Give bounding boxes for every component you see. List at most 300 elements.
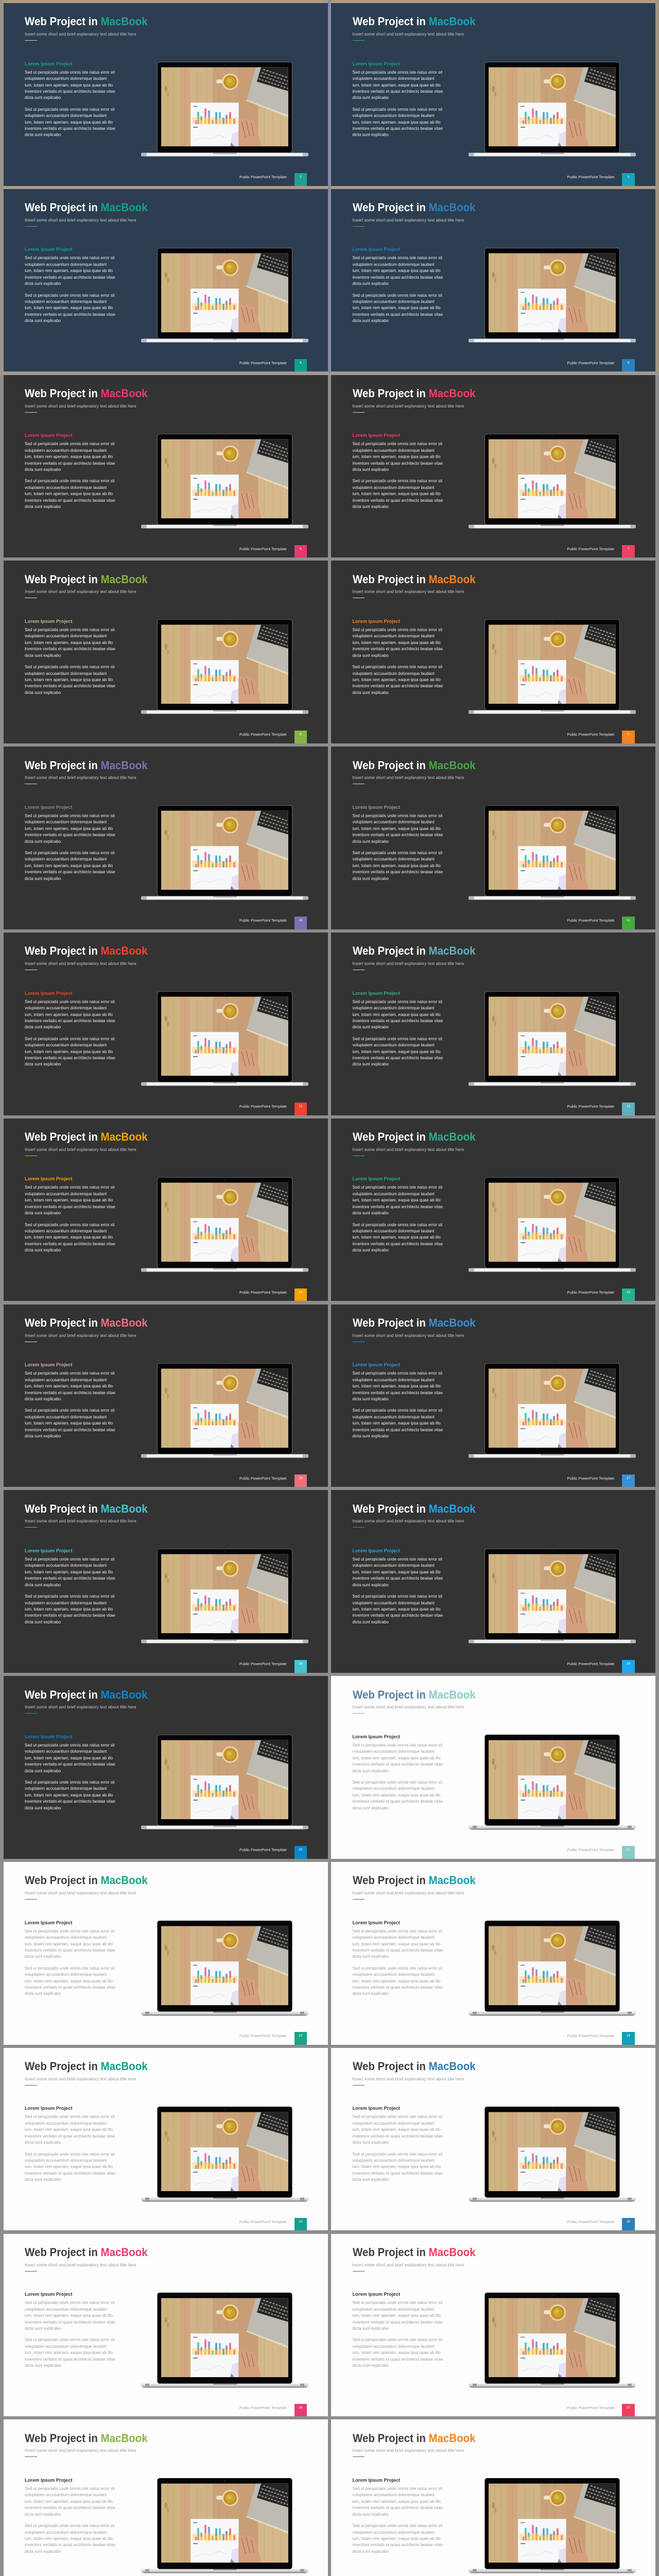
- subtitle: Insert some short and brief explanatory text about title here: [352, 2076, 464, 2081]
- slide 12: dark sea blue: [331, 933, 655, 1115]
- title: Web Project in MacBook: [352, 2432, 475, 2445]
- page badge: [294, 917, 307, 929]
- body text: inventore veritatis et quasi architecto beatae vitae: [25, 2171, 115, 2176]
- body text: inventore veritatis et quasi architecto beatae vitae: [352, 498, 443, 503]
- body text: inventore veritatis et quasi architecto beatae vitae: [25, 684, 115, 688]
- footer label: Public PowerPoint Template: [567, 918, 614, 923]
- section heading: Lorem Ipsum Project: [352, 61, 400, 66]
- body text: Sed ut perspiciatis unde omnis iste natus error sit: [25, 107, 115, 112]
- section heading: Lorem Ipsum Project: [25, 1176, 72, 1181]
- body text: ium, totam rem aperiam, eaque ipsa quae ab illo: [352, 2499, 441, 2504]
- body text: voluptatem accusantium doloremque laudant: [352, 448, 435, 453]
- body text: voluptatem accusantium doloremque laudant: [25, 76, 107, 81]
- body text: inventore veritatis et quasi architecto beatae vitae: [352, 2134, 443, 2139]
- body text: Sed ut perspiciatis unde omnis iste natus error sit: [352, 999, 442, 1004]
- body text: [352, 999, 443, 1066]
- section heading: Lorem Ipsum Project: [352, 247, 400, 252]
- body text: ium, totam rem aperiam, eaque ipsa quae ab illo: [25, 677, 113, 682]
- body text: [352, 1184, 443, 1254]
- page badge: [294, 545, 307, 557]
- laptop mockup: [469, 248, 636, 342]
- subtitle: Insert some short and brief explanatory text about title here: [352, 775, 464, 780]
- body text: dicta sunt explicabo: [352, 132, 389, 137]
- body text: [25, 1370, 115, 1439]
- subtitle: Insert some short and brief explanatory text about title here: [25, 1147, 136, 1152]
- body text: inventore veritatis et quasi architecto beatae vitae: [25, 647, 115, 651]
- page badge: [622, 359, 634, 371]
- body text: Sed ut perspiciatis unde omnis iste natus error sit: [25, 70, 115, 75]
- body text: voluptatem accusantium doloremque laudant: [25, 2158, 107, 2163]
- body text: ium, totam rem aperiam, eaque ipsa quae ab illo: [25, 2536, 113, 2541]
- body text: dicta sunt explicabo: [25, 467, 61, 472]
- body text: dicta sunt explicabo: [25, 2512, 61, 2517]
- body text: dicta sunt explicabo: [25, 132, 61, 137]
- body text: Sed ut perspiciatis unde omnis iste natus error sit: [352, 1780, 442, 1785]
- body text: inventore veritatis et quasi architecto beatae vitae: [352, 1428, 443, 1432]
- body text: inventore veritatis et quasi architecto beatae vitae: [352, 833, 443, 837]
- body text: ium, totam rem aperiam, eaque ipsa quae ab illo: [352, 2127, 441, 2132]
- laptop mockup: [141, 1177, 308, 1272]
- body text: inventore veritatis et quasi architecto beatae vitae: [352, 1762, 443, 1767]
- body text: [25, 1928, 115, 1997]
- title: Web Project in MacBook: [352, 201, 475, 214]
- body text: ium, totam rem aperiam, eaque ipsa quae ab illo: [25, 492, 113, 496]
- slide 8: dark orange: [331, 561, 655, 743]
- body text: dicta sunt explicabo: [25, 1211, 61, 1215]
- slide 17: dark aqua: [3, 1490, 327, 1673]
- page badge: [294, 2218, 307, 2230]
- page badge: [622, 1289, 634, 1301]
- body text: Sed ut perspiciatis unde omnis iste natus error sit: [352, 479, 442, 483]
- body text: inventore veritatis et quasi architecto beatae vitae: [352, 2543, 443, 2547]
- subtitle: Insert some short and brief explanatory text about title here: [25, 2076, 136, 2081]
- page badge: 8: [300, 733, 302, 736]
- page badge: [294, 359, 307, 371]
- body text: ium, totam rem aperiam, eaque ipsa quae ab illo: [25, 120, 113, 125]
- title: Web Project in MacBook: [25, 944, 148, 957]
- body text: dicta sunt explicabo: [352, 1583, 389, 1587]
- slide 15: dark salmon: [3, 1304, 327, 1487]
- body text: dicta sunt explicabo: [352, 2140, 389, 2145]
- slide 1: navy teal: [3, 3, 327, 185]
- body text: dicta sunt explicabo: [352, 1954, 389, 1959]
- subtitle: Insert some short and brief explanatory text about title here: [352, 217, 464, 223]
- section heading: Lorem Ipsum Project: [352, 1176, 400, 1181]
- body text: voluptatem accusantium doloremque laudant: [352, 1935, 435, 1940]
- body text: inventore veritatis et quasi architecto beatae vitae: [352, 870, 443, 874]
- body text: inventore veritatis et quasi architecto beatae vitae: [25, 1799, 115, 1804]
- section heading: Lorem Ipsum Project: [25, 1734, 72, 1739]
- section heading: Lorem Ipsum Project: [352, 2292, 400, 2297]
- body text: voluptatem accusantium doloremque laudant: [352, 1006, 435, 1010]
- body text: voluptatem accusantium doloremque laudant: [25, 1601, 107, 1605]
- body text: dicta sunt explicabo: [352, 1806, 389, 1810]
- body text: [25, 442, 115, 509]
- body text: inventore veritatis et quasi architecto beatae vitae: [25, 1948, 115, 1953]
- body text: Sed ut perspiciatis unde omnis iste natus error sit: [25, 442, 115, 446]
- page badge: 18: [299, 1662, 302, 1666]
- laptop mockup: [141, 62, 308, 157]
- body text: dicta sunt explicabo: [352, 2512, 389, 2517]
- title: Web Project in MacBook: [25, 15, 148, 28]
- body text: dicta sunt explicabo: [25, 1397, 61, 1401]
- body text: voluptatem accusantium doloremque laudant: [352, 299, 435, 304]
- page badge: [622, 1103, 634, 1115]
- laptop mockup: [141, 805, 308, 900]
- subtitle: Insert some short and brief explanatory text about title here: [352, 961, 464, 966]
- subtitle: Insert some short and brief explanatory text about title here: [25, 2262, 136, 2267]
- body text: dicta sunt explicabo: [352, 839, 389, 844]
- page badge: [294, 173, 307, 185]
- body text: dicta sunt explicabo: [352, 467, 389, 472]
- footer label: Public PowerPoint Template: [239, 1848, 287, 1852]
- footer label: Public PowerPoint Template: [239, 2033, 287, 2038]
- body text: Sed ut perspiciatis unde omnis iste natus error sit: [25, 851, 115, 855]
- section heading: Lorem Ipsum Project: [25, 1920, 72, 1925]
- title: Web Project in MacBook: [25, 387, 148, 400]
- title: Web Project in MacBook: [352, 1688, 475, 1701]
- body text: dicta sunt explicabo: [352, 1211, 389, 1215]
- body text: ium, totam rem aperiam, eaque ipsa quae ab illo: [352, 454, 441, 459]
- body text: [352, 442, 443, 509]
- body text: inventore veritatis et quasi architecto beatae vitae: [352, 2319, 443, 2325]
- body text: [25, 1185, 115, 1252]
- title: Web Project in MacBook: [25, 573, 148, 586]
- subtitle: Insert some short and brief explanatory text about title here: [25, 961, 136, 966]
- page badge: 22: [299, 2034, 302, 2038]
- subtitle: Insert some short and brief explanatory text about title here: [352, 2448, 464, 2453]
- section heading: Lorem Ipsum Project: [352, 619, 400, 624]
- body text: voluptatem accusantium doloremque laudant: [25, 2121, 107, 2126]
- laptop mockup: [141, 2478, 308, 2574]
- section heading: Lorem Ipsum Project: [352, 1362, 400, 1367]
- footer label: Public PowerPoint Template: [567, 1104, 614, 1109]
- body text: ium, totam rem aperiam, eaque ipsa quae ab illo: [352, 863, 441, 868]
- laptop mockup: [469, 805, 636, 900]
- body text: voluptatem accusantium doloremque laudant: [352, 820, 435, 824]
- body text: dicta sunt explicabo: [352, 2549, 389, 2554]
- body text: dicta sunt explicabo: [25, 839, 61, 844]
- body text: ium, totam rem aperiam, eaque ipsa quae ab illo: [352, 2164, 441, 2169]
- section heading: Lorem Ipsum Project: [352, 805, 400, 810]
- body text: dicta sunt explicabo: [352, 1991, 389, 1996]
- section heading: Lorem Ipsum Project: [25, 2478, 72, 2483]
- body text: ium, totam rem aperiam, eaque ipsa quae ab illo: [352, 1235, 441, 1240]
- body text: inventore veritatis et quasi architecto beatae vitae: [352, 1390, 443, 1395]
- body text: voluptatem accusantium doloremque laudant: [25, 857, 107, 861]
- footer label: Public PowerPoint Template: [239, 175, 287, 179]
- body text: [352, 2114, 443, 2183]
- body text: voluptatem accusantium doloremque laudant: [25, 1935, 107, 1940]
- body text: Sed ut perspiciatis unde omnis iste natus error sit: [25, 665, 115, 669]
- slide 25: light pink: [3, 2234, 327, 2416]
- body text: ium, totam rem aperiam, eaque ipsa quae ab illo: [25, 1198, 113, 1202]
- body text: [352, 2300, 443, 2369]
- title: Web Project in MacBook: [352, 2246, 475, 2259]
- page badge: 3: [627, 175, 629, 179]
- page badge: [294, 2404, 307, 2416]
- body text: inventore veritatis et quasi architecto beatae vitae: [25, 2505, 115, 2510]
- section heading: Lorem Ipsum Project: [352, 2106, 400, 2111]
- slide 14: dark emerald: [331, 1118, 655, 1301]
- body text: Sed ut perspiciatis unde omnis iste natus error sit: [25, 2337, 115, 2342]
- body text: ium, totam rem aperiam, eaque ipsa quae ab illo: [352, 2350, 441, 2355]
- body text: inventore veritatis et quasi architecto beatae vitae: [25, 1762, 115, 1767]
- laptop mockup: [141, 1549, 308, 1645]
- section heading: Lorem Ipsum Project: [25, 61, 72, 66]
- body text: [352, 1742, 443, 1811]
- body text: [25, 2114, 115, 2183]
- footer label: Public PowerPoint Template: [239, 2405, 287, 2410]
- body text: dicta sunt explicabo: [25, 1434, 61, 1438]
- body text: dicta sunt explicabo: [25, 1806, 61, 1810]
- title: Web Project in MacBook: [25, 1874, 148, 1887]
- slide 22: light cyan: [331, 1862, 655, 2044]
- footer label: Public PowerPoint Template: [567, 2219, 614, 2224]
- body text: voluptatem accusantium doloremque laudant: [25, 2344, 107, 2349]
- page badge: 4: [300, 361, 302, 365]
- slide 21: light teal: [3, 1862, 327, 2044]
- footer label: Public PowerPoint Template: [567, 2405, 614, 2410]
- slide 7: dark olive green: [3, 561, 327, 743]
- footer label: Public PowerPoint Template: [567, 1476, 614, 1481]
- slide 2: navy cyan: [331, 3, 655, 185]
- body text: voluptatem accusantium doloremque laudant: [352, 1229, 435, 1233]
- body text: Sed ut perspiciatis unde omnis iste natus error sit: [25, 1594, 115, 1599]
- body text: Sed ut perspiciatis unde omnis iste natus error sit: [25, 814, 115, 818]
- body text: voluptatem accusantium doloremque laudant: [352, 2344, 435, 2349]
- subtitle: Insert some short and brief explanatory text about title here: [25, 31, 136, 37]
- body text: voluptatem accusantium doloremque laudant: [25, 1972, 107, 1977]
- body text: ium, totam rem aperiam, eaque ipsa quae ab illo: [352, 1384, 441, 1388]
- title: Web Project in MacBook: [352, 15, 475, 28]
- laptop mockup: [469, 62, 636, 157]
- subtitle: Insert some short and brief explanatory text about title here: [352, 589, 464, 594]
- body text: Sed ut perspiciatis unde omnis iste natus error sit: [25, 2152, 115, 2157]
- page badge: [622, 545, 634, 557]
- section heading: Lorem Ipsum Project: [25, 433, 72, 438]
- body text: ium, totam rem aperiam, eaque ipsa quae ab illo: [352, 1198, 441, 1202]
- body text: voluptatem accusantium doloremque laudant: [352, 76, 435, 81]
- body text: ium, totam rem aperiam, eaque ipsa quae ab illo: [352, 2313, 441, 2318]
- body text: voluptatem accusantium doloremque laudant: [352, 671, 435, 676]
- body text: inventore veritatis et quasi architecto beatae vitae: [352, 2171, 443, 2176]
- body text: [352, 628, 443, 695]
- section heading: Lorem Ipsum Project: [25, 2292, 72, 2297]
- page badge: 14: [299, 1291, 302, 1294]
- body text: [352, 1556, 443, 1625]
- page badge: 27: [627, 2406, 630, 2410]
- page badge: [294, 731, 307, 743]
- body text: Sed ut perspiciatis unde omnis iste natus error sit: [352, 1408, 442, 1413]
- body text: dicta sunt explicabo: [352, 281, 389, 286]
- body text: ium, totam rem aperiam, eaque ipsa quae ab illo: [352, 492, 441, 496]
- body text: [25, 1742, 115, 1811]
- subtitle: Insert some short and brief explanatory text about title here: [352, 2262, 464, 2267]
- title: Web Project in MacBook: [25, 1688, 148, 1701]
- body text: Sed ut perspiciatis unde omnis iste natus error sit: [352, 1037, 442, 1041]
- body text: voluptatem accusantium doloremque laudant: [352, 1415, 435, 1419]
- footer label: Public PowerPoint Template: [567, 175, 614, 179]
- body text: inventore veritatis et quasi architecto beatae vitae: [352, 1019, 443, 1023]
- page badge: 17: [627, 1477, 630, 1480]
- page badge: [622, 2032, 634, 2044]
- title: Web Project in MacBook: [352, 1130, 475, 1143]
- page badge: 15: [627, 1291, 630, 1294]
- body text: ium, totam rem aperiam, eaque ipsa quae ab illo: [25, 268, 113, 273]
- body text: Sed ut perspiciatis unde omnis iste natus error sit: [352, 1185, 442, 1190]
- slide 10: dark green: [331, 747, 655, 929]
- body text: Sed ut perspiciatis unde omnis iste natus error sit: [25, 2114, 115, 2119]
- body text: inventore veritatis et quasi architecto beatae vitae: [352, 647, 443, 651]
- body text: ium, totam rem aperiam, eaque ipsa quae ab illo: [25, 863, 113, 868]
- body text: ium, totam rem aperiam, eaque ipsa quae ab illo: [25, 1235, 113, 1240]
- body text: voluptatem accusantium doloremque laudant: [352, 113, 435, 118]
- body text: voluptatem accusantium doloremque laudant: [25, 2493, 107, 2497]
- body text: dicta sunt explicabo: [352, 2326, 389, 2331]
- body text: inventore veritatis et quasi architecto beatae vitae: [352, 1576, 443, 1581]
- title: Web Project in MacBook: [352, 387, 475, 400]
- body text: Sed ut perspiciatis unde omnis iste natus error sit: [352, 1743, 442, 1748]
- body text: voluptatem accusantium doloremque laudant: [25, 1415, 107, 1419]
- section heading: Lorem Ipsum Project: [25, 619, 72, 624]
- footer label: Public PowerPoint Template: [239, 1476, 287, 1481]
- body text: Sed ut perspiciatis unde omnis iste natus error sit: [25, 999, 115, 1004]
- body text: Sed ut perspiciatis unde omnis iste natus error sit: [25, 2523, 115, 2528]
- body text: [25, 1556, 115, 1625]
- body text: ium, totam rem aperiam, eaque ipsa quae ab illo: [352, 1421, 441, 1426]
- subtitle: Insert some short and brief explanatory text about title here: [25, 589, 136, 594]
- page badge: [294, 1289, 307, 1301]
- body text: inventore veritatis et quasi architecto beatae vitae: [352, 1948, 443, 1953]
- subtitle: Insert some short and brief explanatory text about title here: [25, 217, 136, 223]
- body text: voluptatem accusantium doloremque laudant: [352, 1043, 435, 1047]
- body text: ium, totam rem aperiam, eaque ipsa quae ab illo: [352, 1012, 441, 1017]
- laptop mockup: [141, 2293, 308, 2388]
- laptop mockup: [469, 1549, 636, 1645]
- body text: Sed ut perspiciatis unde omnis iste natus error sit: [25, 1371, 115, 1376]
- body text: Sed ut perspiciatis unde omnis iste natus error sit: [352, 2337, 442, 2342]
- title: Web Project in MacBook: [25, 1316, 148, 1329]
- page badge: 2: [300, 175, 302, 179]
- laptop mockup: [469, 2478, 636, 2574]
- slide 23: light green-teal: [3, 2048, 327, 2230]
- body text: dicta sunt explicabo: [352, 95, 389, 100]
- body text: ium, totam rem aperiam, eaque ipsa quae ab illo: [25, 1049, 113, 1054]
- section heading: Lorem Ipsum Project: [352, 1548, 400, 1553]
- body text: Sed ut perspiciatis unde omnis iste natus error sit: [352, 1594, 442, 1599]
- body text: inventore veritatis et quasi architecto beatae vitae: [25, 498, 115, 503]
- body text: inventore veritatis et quasi architecto beatae vitae: [352, 1799, 443, 1804]
- page badge: 13: [627, 1105, 630, 1108]
- body text: voluptatem accusantium doloremque laudant: [352, 1601, 435, 1605]
- body text: inventore veritatis et quasi architecto beatae vitae: [352, 89, 443, 94]
- laptop mockup: [469, 1735, 636, 1831]
- body text: voluptatem accusantium doloremque laudant: [25, 671, 107, 676]
- body text: ium, totam rem aperiam, eaque ipsa quae ab illo: [25, 1756, 113, 1760]
- title: Web Project in MacBook: [352, 1502, 475, 1515]
- laptop mockup: [141, 619, 308, 714]
- section heading: Lorem Ipsum Project: [352, 991, 400, 996]
- body text: dicta sunt explicabo: [25, 2363, 61, 2368]
- body text: inventore veritatis et quasi architecto beatae vitae: [352, 684, 443, 688]
- body text: inventore veritatis et quasi architecto beatae vitae: [25, 1242, 115, 1246]
- subtitle: Insert some short and brief explanatory text about title here: [25, 1518, 136, 1523]
- body text: ium, totam rem aperiam, eaque ipsa quae ab illo: [352, 826, 441, 831]
- body text: dicta sunt explicabo: [25, 95, 61, 100]
- body text: inventore veritatis et quasi architecto beatae vitae: [25, 2357, 115, 2362]
- body text: [25, 256, 115, 323]
- body text: Sed ut perspiciatis unde omnis iste natus error sit: [25, 479, 115, 483]
- body text: ium, totam rem aperiam, eaque ipsa quae ab illo: [25, 82, 113, 88]
- footer label: Public PowerPoint Template: [567, 1662, 614, 1666]
- body text: inventore veritatis et quasi architecto beatae vitae: [352, 126, 443, 131]
- title: Web Project in MacBook: [352, 1316, 475, 1329]
- slide 18: dark sky blue: [331, 1490, 655, 1673]
- slide 27: light olive green: [3, 2419, 327, 2576]
- body text: voluptatem accusantium doloremque laudant: [352, 2493, 435, 2497]
- body text: ium, totam rem aperiam, eaque ipsa quae ab illo: [25, 2313, 113, 2318]
- body text: voluptatem accusantium doloremque laudant: [25, 1229, 107, 1233]
- footer label: Public PowerPoint Template: [239, 918, 287, 923]
- body text: voluptatem accusantium doloremque laudant: [352, 2307, 435, 2312]
- body text: voluptatem accusantium doloremque laudant: [352, 485, 435, 490]
- subtitle: Insert some short and brief explanatory text about title here: [352, 1704, 464, 1709]
- body text: Sed ut perspiciatis unde omnis iste natus error sit: [25, 1966, 115, 1971]
- page badge: [294, 1846, 307, 1859]
- laptop mockup: [469, 434, 636, 529]
- body text: Sed ut perspiciatis unde omnis iste natus error sit: [352, 1223, 442, 1227]
- slide 3: navy green-teal: [3, 189, 327, 371]
- laptop mockup: [469, 1921, 636, 2016]
- body text: dicta sunt explicabo: [352, 1397, 389, 1401]
- body text: ium, totam rem aperiam, eaque ipsa quae ab illo: [25, 640, 113, 645]
- body text: ium, totam rem aperiam, eaque ipsa quae ab illo: [352, 306, 441, 310]
- page badge: 16: [299, 1477, 302, 1480]
- body text: voluptatem accusantium doloremque laudant: [352, 1378, 435, 1382]
- body text: Sed ut perspiciatis unde omnis iste natus error sit: [352, 256, 442, 260]
- page badge: [294, 1103, 307, 1115]
- body text: Sed ut perspiciatis unde omnis iste natus error sit: [352, 2114, 442, 2119]
- body text: Sed ut perspiciatis unde omnis iste natus error sit: [25, 2486, 115, 2491]
- body text: Sed ut perspiciatis unde omnis iste natus error sit: [352, 1371, 442, 1376]
- subtitle: Insert some short and brief explanatory text about title here: [352, 1333, 464, 1338]
- body text: Sed ut perspiciatis unde omnis iste natus error sit: [25, 2300, 115, 2305]
- body text: Sed ut perspiciatis unde omnis iste natus error sit: [352, 628, 442, 632]
- body text: voluptatem accusantium doloremque laudant: [25, 820, 107, 824]
- body text: inventore veritatis et quasi architecto beatae vitae: [352, 2505, 443, 2510]
- body text: dicta sunt explicabo: [352, 690, 389, 695]
- body text: ium, totam rem aperiam, eaque ipsa quae ab illo: [25, 2164, 113, 2169]
- body text: inventore veritatis et quasi architecto beatae vitae: [25, 1985, 115, 1990]
- body text: voluptatem accusantium doloremque laudant: [352, 1563, 435, 1568]
- body text: ium, totam rem aperiam, eaque ipsa quae ab illo: [352, 640, 441, 645]
- body text: inventore veritatis et quasi architecto beatae vitae: [25, 1019, 115, 1023]
- subtitle: Insert some short and brief explanatory text about title here: [352, 1147, 464, 1152]
- body text: [352, 1928, 443, 1997]
- body text: Sed ut perspiciatis unde omnis iste natus error sit: [352, 442, 442, 446]
- body text: ium, totam rem aperiam, eaque ipsa quae ab illo: [352, 1941, 441, 1946]
- body text: ium, totam rem aperiam, eaque ipsa quae ab illo: [352, 1756, 441, 1760]
- subtitle: Insert some short and brief explanatory text about title here: [352, 31, 464, 37]
- page badge: 21: [627, 1848, 630, 1852]
- body text: [25, 628, 115, 695]
- footer label: Public PowerPoint Template: [239, 547, 287, 551]
- body text: ium, totam rem aperiam, eaque ipsa quae ab illo: [352, 1793, 441, 1798]
- slide 16: dark azure: [331, 1304, 655, 1487]
- body text: voluptatem accusantium doloremque laudant: [25, 1786, 107, 1791]
- body text: inventore veritatis et quasi architecto beatae vitae: [352, 461, 443, 466]
